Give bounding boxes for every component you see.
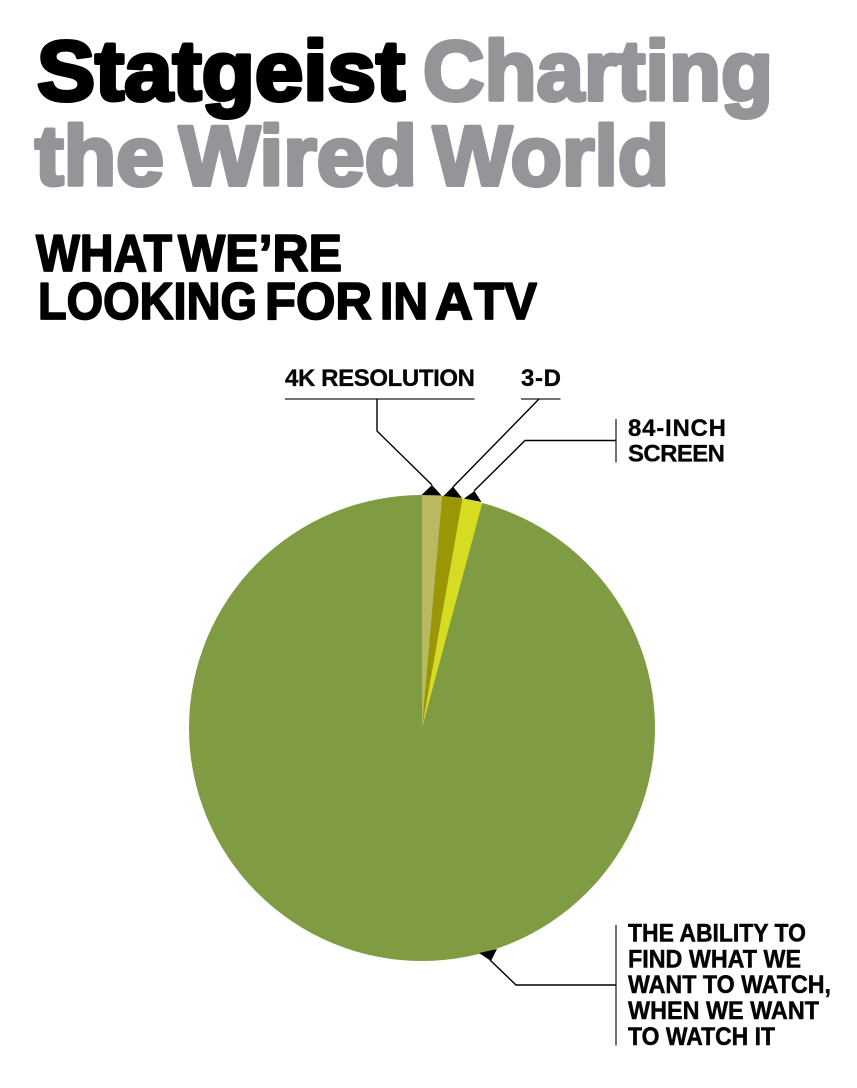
slice: 4K resolution <box>422 495 442 728</box>
callout: 84-inch screen: SCREEN <box>628 440 725 468</box>
slice: 84-inch screen <box>422 498 482 728</box>
heading: WHAT <box>36 225 172 283</box>
heading: A <box>435 273 473 331</box>
heading: LOOKING <box>38 273 257 331</box>
heading <box>36 225 537 331</box>
callout: 3-D: 3-D <box>521 365 561 392</box>
callout: the ability to find what we want to watch: WHEN WE WANT <box>628 997 819 1025</box>
callout: the ability to find what we want to watch: THE ABILITY TO <box>628 920 806 948</box>
callout: the ability to find what we want to watch <box>479 920 831 1051</box>
slice: 3-D <box>422 496 462 728</box>
callout: 3-D <box>444 365 561 498</box>
callout: 84-inch screen: 84-INCH <box>628 415 726 442</box>
callout: the ability to find what we want to watch: TO WATCH IT <box>628 1023 775 1051</box>
callout: 4K resolution <box>285 365 475 496</box>
heading: WE’RE <box>178 225 342 283</box>
callout: the ability to find what we want to watch: FIND WHAT WE <box>628 946 801 974</box>
callout: the ability to find what we want to watch: WANT TO WATCH, <box>628 971 831 999</box>
heading: FOR <box>265 273 372 331</box>
callout: 4K resolution: 4K RESOLUTION <box>285 365 475 392</box>
title <box>35 24 773 203</box>
pie chart <box>189 495 655 961</box>
title: World <box>433 109 669 203</box>
heading: TV <box>474 273 537 331</box>
heading: IN <box>380 273 428 331</box>
slice: the ability to find what we want to watch <box>189 495 655 961</box>
title: Wired <box>179 109 417 203</box>
callout: 84-inch screen <box>464 415 726 502</box>
title: the <box>35 109 164 203</box>
title: Charting <box>423 24 773 118</box>
title: Statgeist <box>37 24 405 118</box>
